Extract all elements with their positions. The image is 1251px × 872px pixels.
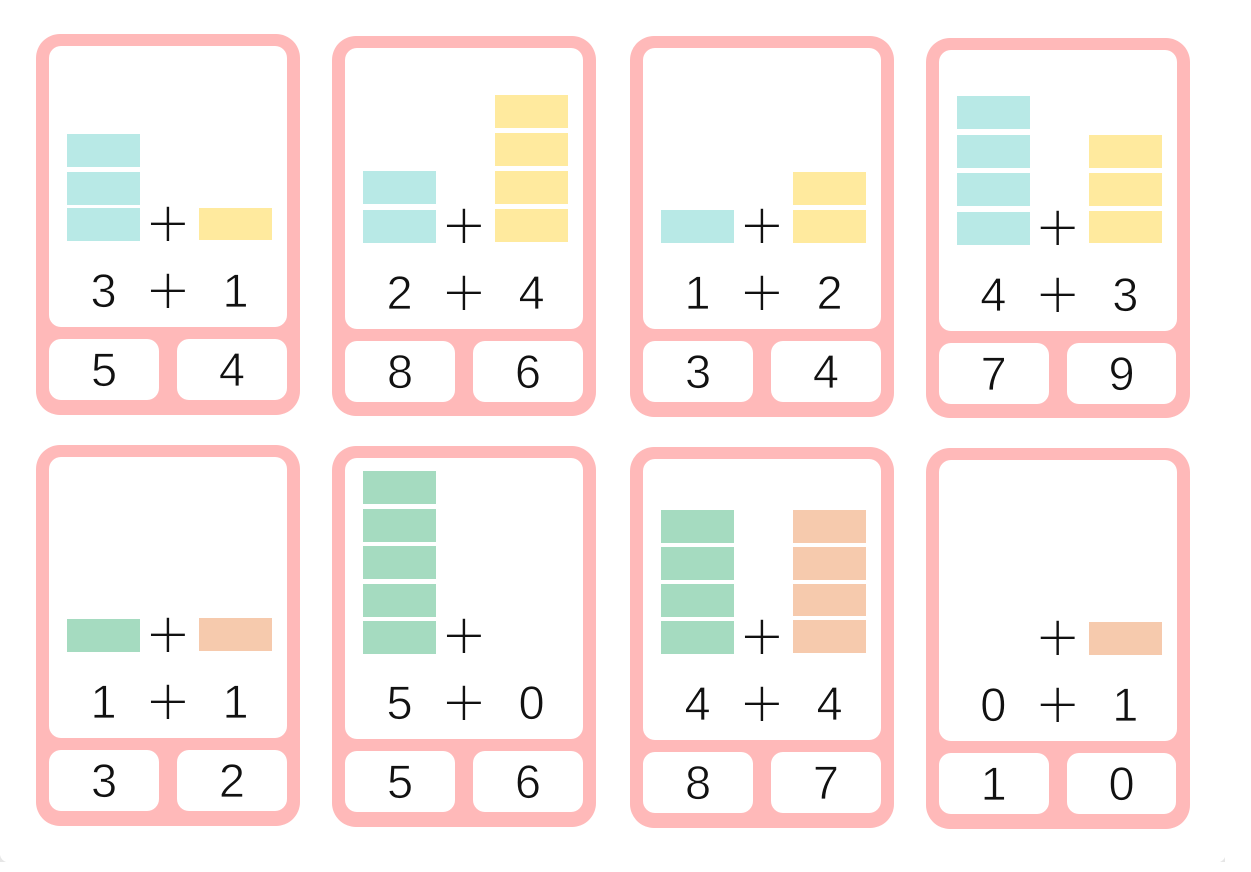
plus sign: + (1035, 595, 1080, 680)
blocks: addend 1 (1089, 622, 1162, 655)
card: 1 + 1: 1 (91, 675, 117, 728)
answer option 0: 0 (1109, 757, 1135, 810)
equation (980, 662, 1138, 747)
card: 1 + 2 (630, 36, 894, 416)
answer option 7: 7 (813, 756, 839, 809)
answer option 7 (771, 752, 881, 813)
equation (685, 661, 843, 746)
card: 4 + 3: 3 (1112, 268, 1138, 321)
answer option 4 (771, 341, 881, 402)
plus sign: + (740, 594, 784, 679)
answer option 8 (643, 752, 753, 813)
card: 2 + 4: 2 (387, 266, 413, 318)
answer option 8: 8 (685, 756, 711, 809)
answer option 3 (643, 341, 753, 402)
card: 4 + 4: 4 (685, 677, 711, 730)
answer option 4 (177, 339, 287, 400)
card: 5 + 0: 5 (387, 676, 413, 729)
blocks: addend 2 (793, 172, 866, 243)
card: 1 + 2: 2 (817, 266, 843, 319)
answer option 2: 2 (219, 754, 245, 807)
blocks: addend 3 (67, 134, 140, 241)
equation (387, 250, 545, 334)
card: 0 + 1: 1 (1112, 678, 1138, 731)
equation (685, 250, 843, 335)
answer option 6: 6 (515, 755, 541, 808)
answer option 6 (473, 340, 583, 402)
blocks: addend 1 (199, 618, 272, 651)
answer option 0 (1067, 753, 1176, 814)
plus sign: + (146, 181, 190, 266)
card: 2 + 4 (332, 36, 596, 416)
answer option 3: 3 (91, 754, 117, 807)
answer option 9: 9 (1109, 347, 1135, 400)
blocks: addend 4 (495, 95, 568, 242)
card: 4 + 4 (630, 447, 894, 828)
blocks: addend 4 (957, 96, 1030, 245)
answer option 5 (345, 751, 455, 812)
equation (91, 659, 249, 744)
blocks: addend 1 (67, 619, 140, 652)
equation (387, 660, 545, 745)
plus sign: + (442, 182, 486, 268)
blocks: addend 2 (363, 171, 436, 243)
card: 1 + 2: + (740, 250, 784, 335)
card: 4 + 4: + (740, 661, 784, 746)
blocks: addend 1 (661, 210, 734, 243)
card: 3 + 1 (36, 34, 300, 414)
answer option 8: 8 (387, 344, 413, 398)
card: 0 + 1 (926, 448, 1190, 828)
answer option 5: 5 (387, 755, 413, 808)
answer option 1 (939, 753, 1048, 814)
card: 5 + 0: 0 (519, 676, 545, 729)
blocks: addend 3 (1089, 135, 1162, 243)
blocks: addend 1 (199, 208, 272, 240)
plus sign: + (442, 593, 486, 678)
answer option 9 (1067, 343, 1176, 404)
card: 4 + 4: 4 (817, 677, 843, 730)
plus sign: + (740, 183, 784, 268)
answer option 5: 5 (91, 343, 117, 396)
card: 4 + 3: 4 (980, 268, 1006, 321)
answer option 2 (177, 750, 287, 811)
card: 5 + 0 (332, 446, 596, 826)
card: 3 + 1: 1 (223, 264, 249, 317)
answer option 8 (345, 340, 455, 402)
plus sign: + (1035, 185, 1080, 270)
card: 3 + 1: 3 (91, 264, 117, 317)
card: 5 + 0: + (442, 660, 486, 745)
answer option 6 (473, 751, 583, 812)
equation (980, 252, 1138, 337)
answer option 3 (49, 750, 159, 811)
card: 4 + 3 (926, 38, 1190, 418)
card: 1 + 1: 1 (223, 675, 249, 728)
answer option 6: 6 (515, 344, 541, 398)
answer option 5 (49, 339, 159, 400)
card: 3 + 1: + (146, 248, 190, 333)
card: 0 + 1: 0 (980, 678, 1006, 731)
equation (91, 248, 249, 333)
card: 1 + 2: 1 (685, 266, 711, 319)
blocks: addend 5 (363, 471, 436, 654)
blocks: addend 4 (793, 510, 866, 653)
card: 4 + 3: + (1035, 252, 1080, 337)
plus sign: + (146, 592, 190, 677)
answer option 7: 7 (981, 347, 1007, 400)
answer option 4: 4 (219, 343, 245, 396)
card: 2 + 4: 4 (519, 266, 545, 318)
card: 0 + 1: + (1035, 662, 1080, 747)
blocks: addend 4 (661, 510, 734, 654)
answer option 4: 4 (813, 345, 839, 398)
answer option 3: 3 (685, 345, 711, 398)
card: 1 + 1 (36, 445, 300, 826)
card: 1 + 1: + (146, 659, 190, 744)
answer option 7 (939, 343, 1048, 404)
answer option 1: 1 (981, 757, 1007, 810)
card: 2 + 4: + (442, 250, 486, 334)
